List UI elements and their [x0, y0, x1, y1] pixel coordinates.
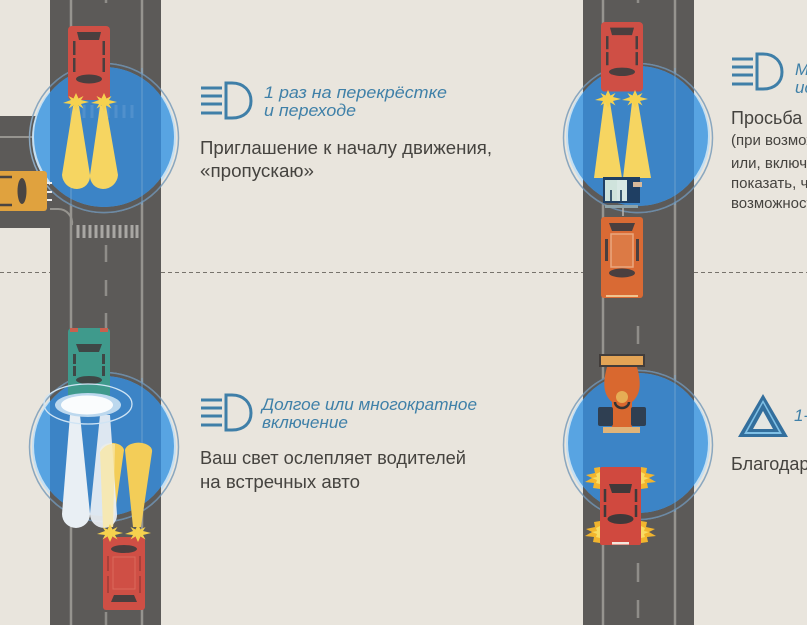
hazard flashes	[585, 467, 656, 543]
red car	[68, 26, 110, 100]
icon: headlight	[732, 54, 782, 89]
description: «пропускаю»	[200, 161, 314, 181]
description: Ваш свет ослепляет водителей	[200, 448, 466, 468]
signal heading	[795, 60, 807, 97]
panel: invitation to start moving	[0, 26, 492, 212]
signal heading	[260, 395, 477, 432]
blue circle	[564, 64, 712, 212]
description	[200, 138, 492, 181]
panel: your lights blind oncoming drivers	[30, 328, 477, 610]
panel: thank you	[564, 355, 807, 545]
blinding flash	[44, 384, 132, 424]
panel: request to give way	[564, 22, 807, 298]
light beams	[594, 102, 651, 178]
red car	[103, 537, 145, 610]
red car	[601, 22, 643, 92]
signal heading: включение	[262, 413, 348, 432]
blue circle	[564, 370, 712, 520]
yellow taxi	[0, 171, 52, 211]
red car	[600, 467, 641, 545]
blinding white beams	[62, 415, 117, 528]
signal heading: Долгое или многократное	[260, 395, 477, 414]
signal heading: 1 раз на перекрёстке	[264, 83, 447, 102]
signal heading	[264, 83, 447, 120]
headlight flashes	[63, 93, 117, 111]
icon: headlight	[201, 395, 251, 430]
description: на встречных авто	[200, 472, 360, 492]
red oncoming beams	[100, 443, 152, 527]
headlight flashes	[595, 90, 648, 108]
right road	[583, 0, 694, 625]
section divider	[0, 272, 807, 274]
orange car	[601, 217, 643, 298]
signal heading: и переходе	[264, 101, 356, 120]
left road with intersection	[0, 0, 161, 625]
description	[200, 448, 466, 492]
blue circle	[30, 64, 178, 212]
yellow beam overlay	[100, 444, 115, 527]
icon: warning triangle	[738, 394, 788, 437]
description: Приглашение к началу движения,	[200, 138, 492, 158]
description	[731, 108, 807, 212]
headlight flashes	[97, 524, 151, 542]
blue circle	[30, 372, 178, 522]
light beams	[62, 106, 118, 189]
icon: headlight	[201, 83, 251, 118]
teal car	[68, 328, 110, 400]
race car	[598, 355, 646, 433]
vehicle ahead lit by beams	[603, 177, 642, 216]
